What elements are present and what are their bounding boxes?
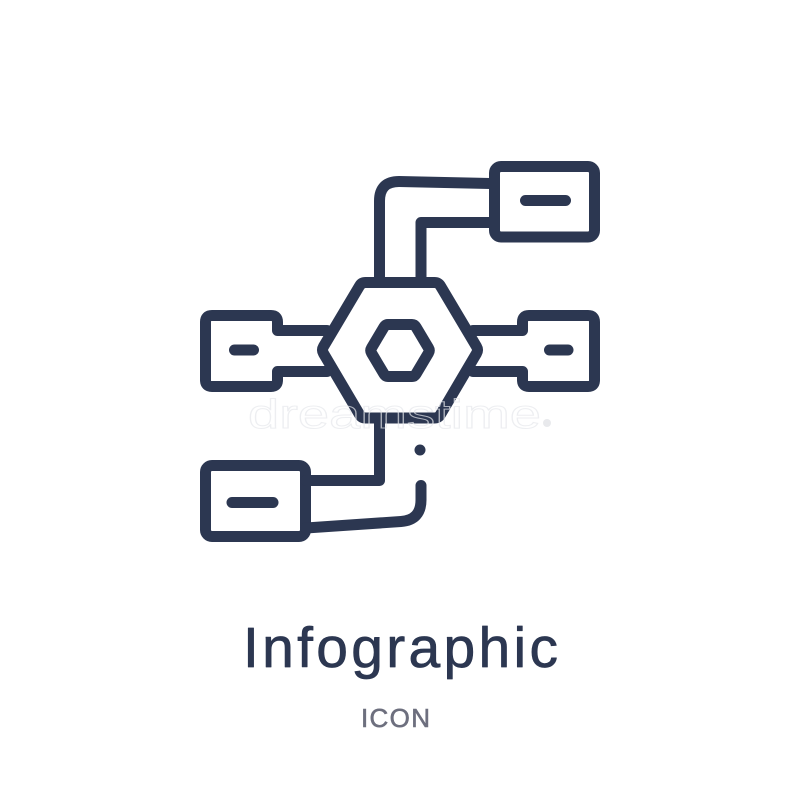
top-right box xyxy=(494,166,594,237)
inner hexagon xyxy=(371,324,429,376)
top-right connector pipe xyxy=(380,182,490,278)
right box dash xyxy=(550,344,568,356)
right box with connector xyxy=(473,316,594,386)
outer hexagon xyxy=(322,282,478,418)
bottom-left box dash xyxy=(232,497,273,508)
left box dash xyxy=(234,344,254,356)
top-right box dash xyxy=(526,195,566,206)
left box with connector xyxy=(206,316,327,386)
bottom-left connector upper line xyxy=(306,423,380,480)
bottom-left connector lower line xyxy=(306,486,421,528)
subtitle: ICON xyxy=(361,703,430,733)
bottom-left box xyxy=(206,466,306,536)
icon: network of connected boxes xyxy=(206,166,594,536)
title: Infographic xyxy=(243,616,558,680)
watermark: dreamstime xyxy=(248,391,541,437)
dot xyxy=(414,444,426,456)
